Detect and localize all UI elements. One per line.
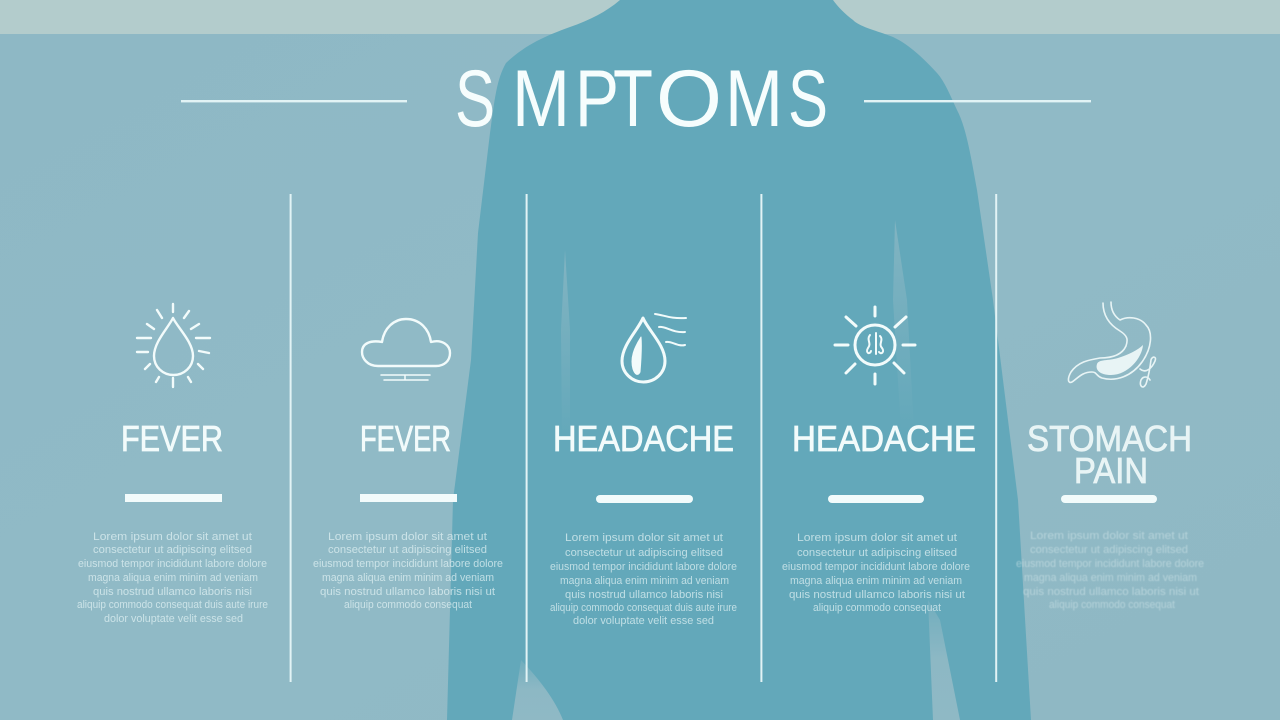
heading: stomach pain: STOMACH — [1027, 418, 1192, 459]
body text: magna aliqua enim minim ad veniam — [1024, 572, 1197, 584]
body text: consectetur ut adipiscing elitsed — [328, 544, 487, 556]
body text: eiusmod tempor incididunt labore dolore — [782, 561, 970, 573]
body text: aliquip commodo consequat duis aute irure — [550, 602, 737, 614]
heading: stomach pain: PAIN — [1074, 450, 1148, 491]
title: M — [512, 54, 570, 144]
right arm gap lower — [928, 600, 960, 720]
body text: Lorem ipsum dolor sit amet ut — [93, 531, 252, 543]
body text: dolor voluptate velit esse sed — [573, 615, 714, 627]
body text — [782, 532, 970, 614]
right arm gap upper — [893, 220, 914, 430]
body text: aliquip commodo consequat — [813, 602, 941, 614]
title: S — [455, 54, 495, 144]
heading: fever: FEVER — [121, 418, 223, 459]
underline bar — [1061, 495, 1157, 503]
title: O — [656, 54, 722, 144]
body text: aliquip commodo consequat duis aute irure — [77, 599, 268, 611]
body text: Lorem ipsum dolor sit amet ut — [797, 532, 957, 544]
heading: stomach pain — [1027, 418, 1192, 491]
heading: headache: HEADACHE — [792, 418, 976, 459]
panel: headache, second column — [782, 307, 976, 614]
body text: consectetur ut adipiscing elitsed — [1030, 544, 1188, 556]
title — [455, 54, 828, 144]
body text: quis nostrud ullamco laboris nisi — [93, 586, 252, 598]
title: P — [575, 54, 619, 144]
icon: stomach — [1068, 302, 1155, 387]
body text: quis nostrud ullamco laboris nisi ut — [789, 589, 965, 601]
body text: eiusmod tempor incididunt labore dolore — [313, 558, 503, 570]
panel: fever, second column — [313, 319, 503, 611]
panel: headache — [550, 314, 737, 627]
body text: eiusmod tempor incididunt labore dolore — [78, 558, 267, 570]
title: M — [725, 54, 783, 144]
heading: headache: HEADACHE — [553, 418, 734, 459]
top band — [0, 0, 1280, 34]
left arm gap upper — [561, 250, 570, 440]
icon: cloud — [362, 319, 450, 380]
body text: eiusmod tempor incididunt labore dolore — [1016, 558, 1204, 570]
body text: magna aliqua enim minim ad veniam — [560, 575, 729, 587]
body text: magna aliqua enim minim ad veniam — [790, 575, 962, 587]
icon: fever drop with rays — [137, 304, 210, 387]
panel: fever — [77, 304, 268, 625]
title rule left — [181, 100, 407, 102]
body silhouette — [447, 0, 1031, 720]
panel: stomach pain — [1016, 302, 1204, 611]
left arm gap lower — [512, 660, 563, 720]
body text: quis nostrud ullamco laboris nisi ut — [1023, 586, 1199, 598]
body text — [1016, 530, 1204, 611]
body text: Lorem ipsum dolor sit amet ut — [328, 531, 487, 543]
title: T — [613, 54, 653, 144]
body text: magna aliqua enim minim ad veniam — [88, 572, 258, 584]
underline bar — [125, 494, 222, 502]
icon: sun with brain — [835, 307, 915, 384]
body text: aliquip commodo consequat — [1049, 599, 1175, 611]
body text: Lorem ipsum dolor sit amet ut — [1030, 530, 1188, 542]
body text — [550, 532, 737, 627]
body text: Lorem ipsum dolor sit amet ut — [565, 532, 723, 544]
heading: fever garbled: FEVER — [360, 418, 451, 459]
title rule right — [864, 100, 1091, 102]
column dividers — [290, 194, 997, 682]
underline bar — [360, 494, 457, 502]
body text: quis nostrud ullamco laboris nisi — [565, 589, 723, 601]
body text: aliquip commodo consequat — [344, 599, 472, 611]
body text: quis nostrud ullamco laboris nisi ut — [320, 586, 495, 598]
body text: consectetur ut adipiscing elitsed — [797, 547, 957, 559]
underline bar — [828, 495, 924, 503]
underline bar — [596, 495, 693, 503]
body text — [313, 531, 503, 611]
icon: drop with wind lines — [622, 314, 686, 382]
body text: eiusmod tempor incididunt labore dolore — [550, 561, 737, 573]
body text: consectetur ut adipiscing elitsed — [565, 547, 723, 559]
body text: magna aliqua enim minim ad veniam — [322, 572, 494, 584]
title: S — [788, 54, 828, 144]
body text — [77, 531, 268, 625]
body text: consectetur ut adipiscing elitsed — [93, 544, 252, 556]
body text: dolor voluptate velit esse sed — [104, 613, 243, 625]
